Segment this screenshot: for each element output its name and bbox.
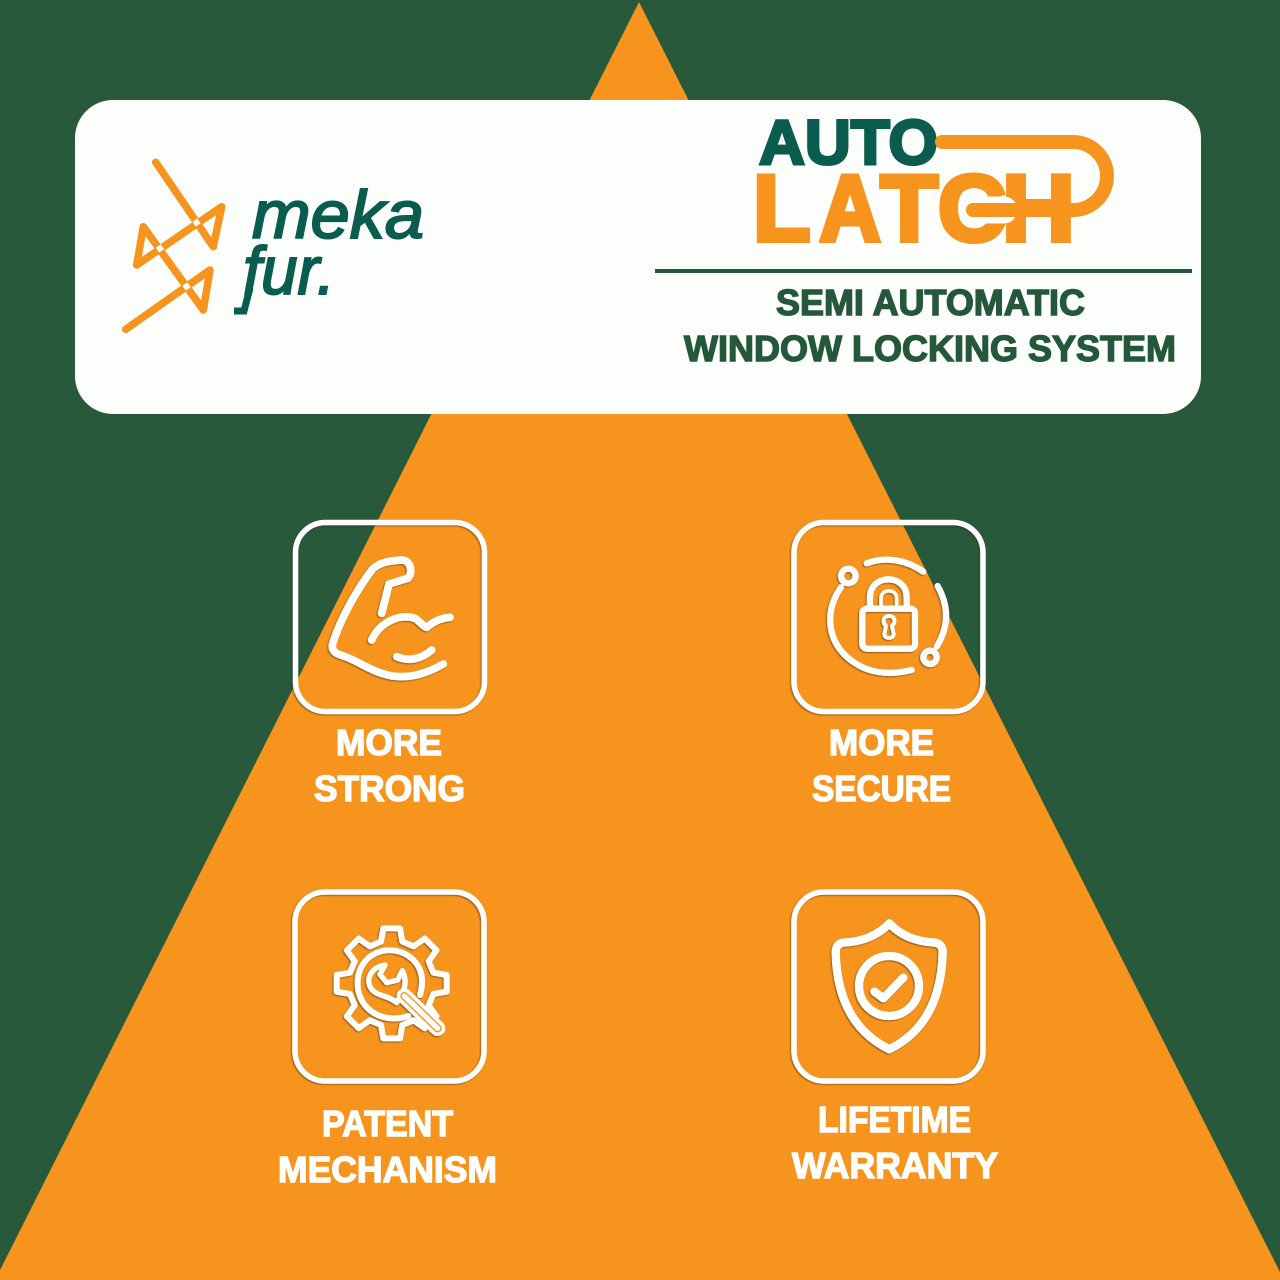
header panel	[75, 100, 1201, 414]
label: more secure: SECURE	[812, 768, 951, 809]
label: more strong	[314, 722, 465, 809]
icon box: secure	[794, 522, 983, 712]
logo word: LATCH: T	[880, 156, 938, 260]
feature: more secure	[794, 522, 983, 809]
label: lifetime warranty: WARRANTY	[792, 1145, 998, 1186]
label: more secure	[812, 722, 951, 809]
wordmark: meka: meka	[252, 177, 424, 253]
icon: padlock with ring	[830, 560, 946, 673]
label: patent mechanism: MECHANISM	[278, 1149, 497, 1190]
icon: shield with check	[836, 923, 943, 1049]
icon: gear with wrench	[337, 928, 447, 1038]
meka fur logo	[126, 162, 424, 329]
subtitle: SEMI AUTOMATIC	[776, 282, 1085, 323]
feature: patent mechanism	[278, 892, 497, 1190]
divider line	[655, 269, 1192, 273]
icon box: strong	[296, 522, 484, 712]
subtitle	[684, 282, 1176, 369]
logo word: LATCH	[753, 156, 1075, 260]
logo word: LATCH: A	[820, 156, 880, 260]
feature: more strong	[296, 522, 484, 809]
logo word: AUTO: AUTO	[759, 108, 938, 178]
label: lifetime warranty: LIFETIME	[818, 1099, 971, 1140]
icon box: warranty	[794, 892, 983, 1081]
wordmark: fur.: fur.	[243, 233, 335, 309]
icon box: patent	[295, 892, 484, 1081]
label: patent mechanism	[278, 1103, 497, 1190]
logo word: LATCH: L	[753, 156, 810, 260]
label: more secure: MORE	[829, 722, 934, 763]
subtitle: WINDOW LOCKING SYSTEM	[684, 328, 1176, 369]
icon: flexed arm	[332, 560, 450, 677]
logo word: LATCH: C	[938, 156, 1006, 260]
auto latch logo	[753, 108, 1107, 260]
label: patent mechanism: PATENT	[322, 1103, 453, 1144]
label: more strong: MORE	[336, 722, 442, 763]
label: lifetime warranty	[792, 1099, 998, 1186]
icon: meka fur zigzag mark	[126, 162, 222, 329]
feature: lifetime warranty	[792, 892, 998, 1186]
wordmark: f descender	[234, 288, 250, 311]
label: more strong: STRONG	[314, 768, 465, 809]
logo word: LATCH: H	[1002, 156, 1075, 260]
latch loop line	[942, 142, 1107, 210]
